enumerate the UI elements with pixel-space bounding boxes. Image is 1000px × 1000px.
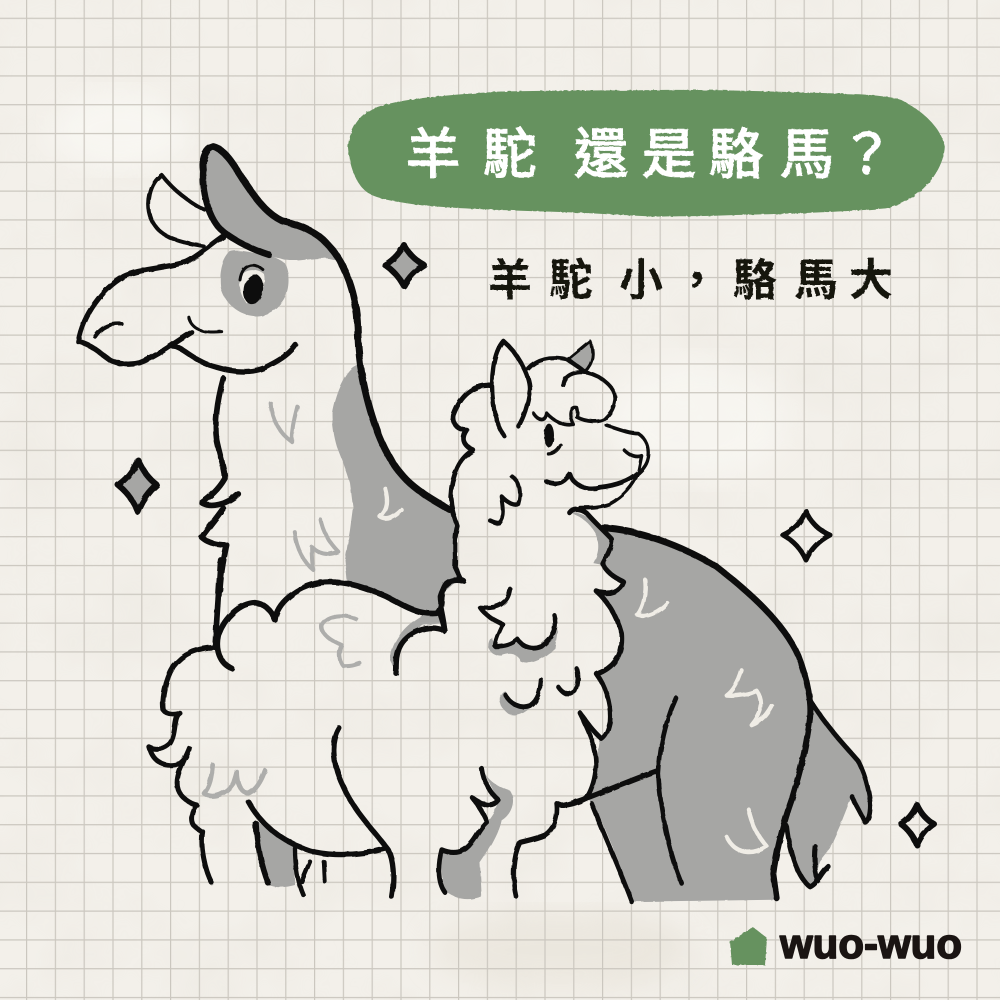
llama body bbox=[149, 560, 463, 897]
eyelid bbox=[240, 265, 263, 280]
neck front lower bbox=[215, 560, 221, 647]
neck front outline bbox=[202, 378, 238, 590]
logo bbox=[730, 920, 962, 967]
nostril bbox=[95, 324, 122, 337]
small ear bbox=[149, 175, 205, 246]
grey neck fur marks bbox=[271, 403, 338, 570]
wool curve three bbox=[558, 669, 578, 694]
head outline bbox=[203, 147, 450, 510]
head wool outline bbox=[440, 385, 492, 632]
muzzle bbox=[607, 425, 649, 476]
chest top shadow bbox=[570, 513, 610, 565]
llama head bbox=[78, 147, 450, 590]
alpaca eye bbox=[544, 424, 554, 447]
tummy line bbox=[563, 770, 658, 805]
shadow under wool bbox=[390, 613, 442, 670]
bangs bbox=[533, 407, 605, 425]
subtitle: 羊駝小，駱馬大 bbox=[488, 244, 893, 308]
cream fur marks bbox=[637, 580, 772, 852]
front leg line bbox=[592, 804, 632, 902]
tail outline bbox=[787, 700, 870, 887]
alpaca body fill bbox=[587, 528, 810, 902]
hind leg line bbox=[256, 823, 268, 883]
body wool outline bbox=[149, 647, 213, 883]
jaw bbox=[173, 345, 296, 372]
alpaca back outline bbox=[603, 528, 810, 898]
grey wool curl bbox=[321, 616, 360, 666]
wool lobe bbox=[396, 613, 445, 673]
neck fluff bbox=[490, 476, 520, 523]
llama bbox=[78, 147, 463, 897]
title banner bbox=[348, 90, 945, 217]
far ear bbox=[568, 341, 593, 371]
eye bbox=[241, 273, 265, 306]
back wool outline bbox=[217, 580, 463, 668]
wool curve one bbox=[480, 589, 555, 648]
banner background bbox=[348, 90, 945, 217]
belly and leg line bbox=[334, 728, 393, 897]
alpaca bbox=[439, 341, 870, 902]
sparkle star bottom right bbox=[901, 805, 934, 845]
head top wool bbox=[528, 358, 615, 419]
eye patch bbox=[220, 251, 289, 316]
llama neck shadow bbox=[332, 363, 458, 615]
hind leg shading bbox=[258, 822, 295, 887]
ear inner line bbox=[203, 170, 269, 255]
under eye bbox=[548, 445, 561, 454]
wool curve two bbox=[505, 680, 541, 707]
front leg shadow bbox=[440, 768, 513, 899]
logo wordmark: wuo-wuo bbox=[779, 920, 962, 967]
tail fill bbox=[787, 700, 870, 885]
sparkle star right bbox=[783, 511, 830, 560]
wool shadow one bbox=[488, 626, 558, 663]
near ear bbox=[492, 341, 530, 435]
front leg outline bbox=[439, 768, 498, 892]
sparkle star near head bbox=[385, 245, 424, 286]
logo house icon bbox=[730, 927, 767, 965]
eye highlight bbox=[240, 270, 265, 303]
far leg lines bbox=[295, 848, 325, 895]
belly line bbox=[248, 802, 387, 855]
ear and forehead shading bbox=[203, 147, 338, 261]
grey wool mark bbox=[204, 765, 265, 796]
snout bbox=[78, 236, 223, 364]
hind leg inner line bbox=[658, 698, 682, 883]
mouth bbox=[188, 317, 222, 332]
wool shadow two bbox=[500, 691, 540, 716]
jaw bbox=[580, 472, 638, 508]
cream shoulder fur mark bbox=[380, 488, 402, 519]
alpaca drawing bbox=[439, 341, 870, 902]
sparkle star left bbox=[118, 460, 157, 512]
chest wool outline bbox=[514, 510, 623, 896]
mouth bbox=[547, 472, 638, 488]
banner title text: 羊駝還是駱馬？ bbox=[406, 110, 894, 189]
